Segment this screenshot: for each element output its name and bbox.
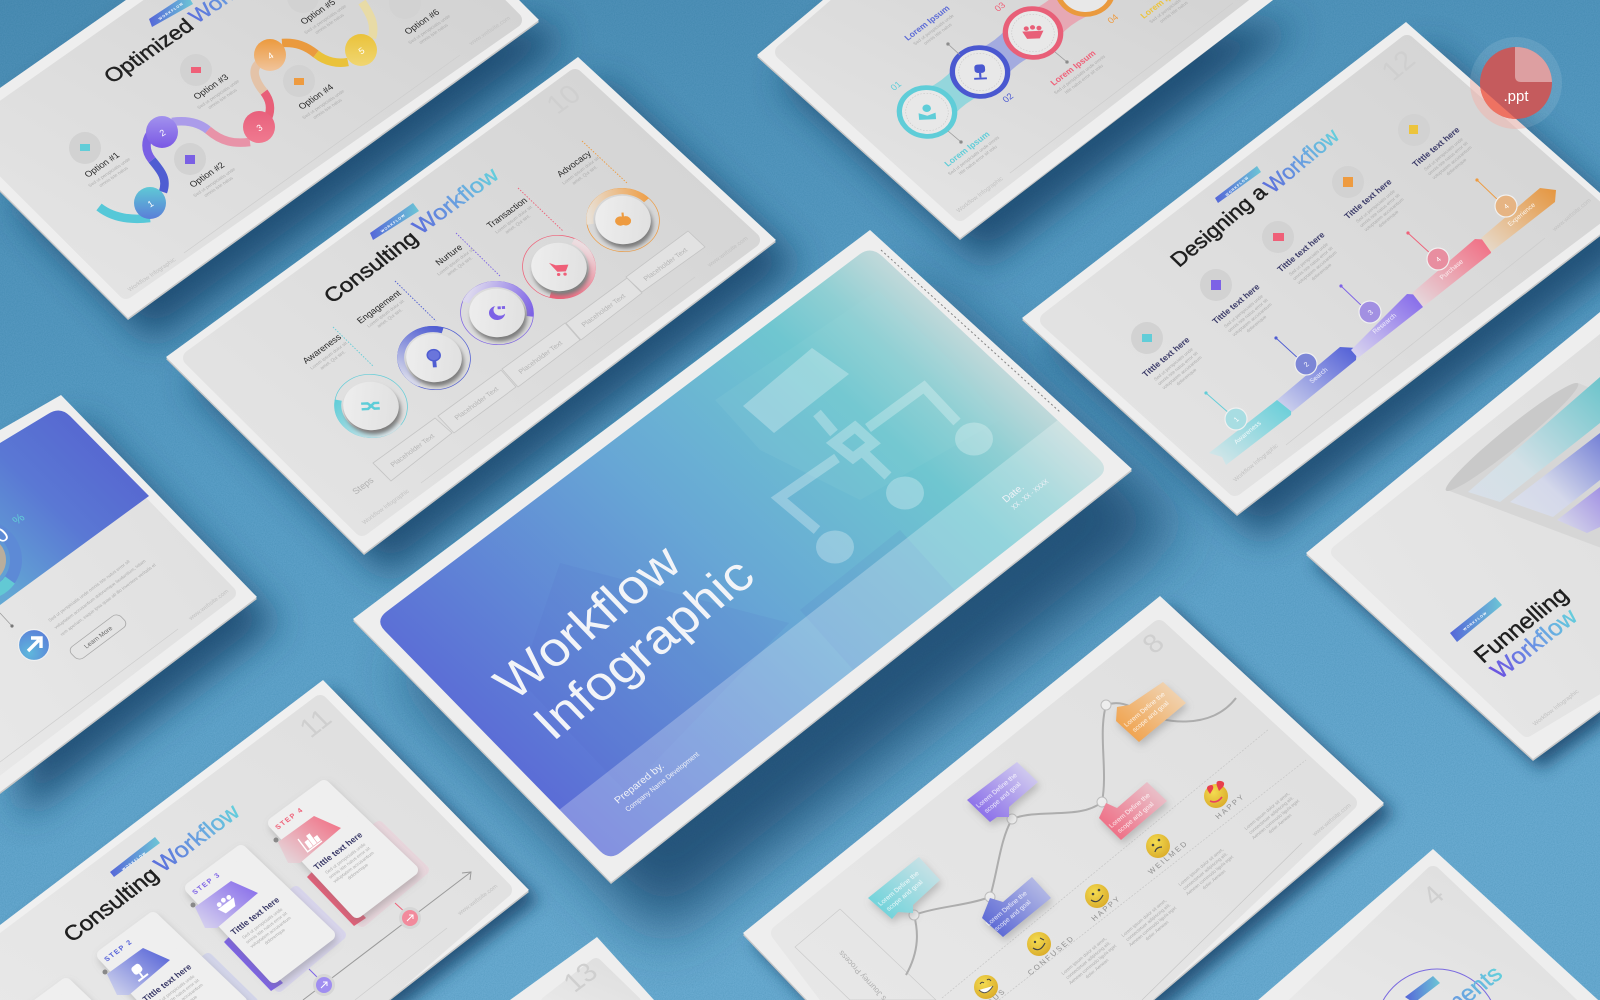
emotion descriptions: Aenean commodo ligula eget <box>1185 854 1235 896</box>
cover gradient with overlays <box>380 250 1104 856</box>
option labels: Sed ut perspiciatis unde <box>192 167 237 198</box>
title and body blocks: Sed ut perspiciatis unde <box>1288 242 1329 277</box>
stage labels: Lorem ipsum dolor sit <box>309 341 349 370</box>
placeholder labels: Placeholder Text <box>518 340 564 376</box>
title and body blocks: Sed ut perspiciatis unde <box>1355 189 1396 224</box>
numbered nodes: 2 <box>1303 361 1311 369</box>
title and body blocks: voluptatem accusantium <box>1431 145 1473 180</box>
body text: voluptatem accusantium doloremque laudantium, totam <box>53 558 147 630</box>
heading: consulting workflow: Workflow <box>407 163 504 239</box>
ring numbers: 03 <box>992 0 1007 13</box>
step nodes 1 to 5: 2 <box>158 127 167 138</box>
leaders <box>947 43 1068 143</box>
icon: arrow button <box>18 630 50 660</box>
emotion descriptions: consectetuer adipiscing elit. <box>1248 795 1295 835</box>
chart: funnel <box>1440 376 1600 555</box>
button: learn more: Learn More <box>83 625 115 650</box>
arrow: awareness: Awareness <box>1233 420 1263 446</box>
option labels: omnis iste natus <box>418 22 450 45</box>
image header <box>0 410 149 605</box>
stage labels: Transaction <box>485 196 529 230</box>
step nodes 1 to 5: 3 <box>255 122 264 133</box>
arrow: awareness <box>1209 400 1292 465</box>
arrow: research <box>1351 294 1423 358</box>
labels: omnis iste natus <box>1159 0 1189 24</box>
callout: purple: Lorem Define the <box>975 772 1019 810</box>
badge: workflow: WORKFLOW <box>1225 176 1250 197</box>
labels: Sed ut perspiciatis unde omnis <box>947 135 1001 176</box>
title and body blocks: Sed ut perspiciatis unde <box>1423 137 1464 172</box>
step nodes 1 to 5: 1 <box>146 198 155 209</box>
callout: purple: scope and goal <box>983 781 1023 815</box>
ring numbers <box>888 0 1120 104</box>
ring 04 <box>1046 0 1124 24</box>
option labels: Sed ut perspiciatis unde <box>303 4 348 35</box>
step card 4 <box>274 786 424 926</box>
callout: red <box>1099 782 1167 840</box>
heading: designing a workflow: Designing a <box>1166 181 1272 271</box>
timeline nodes <box>309 903 421 996</box>
heading: designing a workflow <box>1166 124 1344 271</box>
stage labels: Lorem ipsum dolor sit <box>366 299 406 328</box>
labels: Sed ut perspiciatis unde omnis <box>1053 54 1107 95</box>
placeholder step boxes <box>373 231 705 481</box>
emotion descriptions: Aenean commodo ligula eget <box>1128 905 1178 947</box>
steps label: Steps <box>350 475 376 496</box>
arrow: search <box>1277 347 1357 412</box>
title and body blocks: voluptatem accusantium <box>1296 250 1338 285</box>
arrow: experience <box>1481 188 1556 252</box>
journey curve <box>906 698 1236 975</box>
panel: slide 12 designing a workflow <box>1022 22 1600 516</box>
heading: consulting workflow <box>58 799 245 947</box>
dial: nurture <box>433 258 561 368</box>
stage labels: Engagement <box>355 288 403 325</box>
labels: Lorem Ipsum <box>902 3 952 42</box>
callout: red: scope and goal <box>1116 801 1156 835</box>
stage labels <box>300 147 605 375</box>
stage labels: amet. Qui sint. <box>319 349 346 371</box>
panel: slide with linked circles <box>757 0 1273 240</box>
title and body blocks: Tittle text here <box>1210 282 1262 326</box>
body text: Sed ut perspiciatis unde omnis iste natus error sit <box>47 559 131 623</box>
stage labels: Nurture <box>433 242 465 267</box>
callout: orange: Lorem Define the <box>1123 691 1167 729</box>
title and body blocks: Sed ut perspiciatis unde <box>1153 347 1194 382</box>
emotion labels: WEILMED <box>1146 838 1190 876</box>
connectors between rings <box>910 0 1103 129</box>
panel: main cover slide <box>340 220 1140 900</box>
footer text <box>362 236 750 526</box>
option labels: Sed ut perspiciatis unde <box>301 89 346 120</box>
slide number: 8 <box>1136 628 1170 659</box>
panel: slide left learn more <box>0 395 257 794</box>
badge: workflow: WORKFLOW <box>121 851 147 871</box>
step nodes 1 to 5 <box>134 34 377 219</box>
labels: Lorem Ipsum <box>1048 48 1098 87</box>
labels <box>902 0 1197 181</box>
dial: transaction <box>497 213 621 321</box>
heading: funnelling workflow: Workflow <box>1485 603 1584 684</box>
emotion descriptions: Lorem ipsum dolor sit amet, <box>1060 936 1108 976</box>
title and body blocks: voluptatem accusantium <box>1161 355 1203 390</box>
badge: workflow <box>1405 976 1440 1000</box>
option labels <box>78 0 456 202</box>
donut chart fragment: % <box>9 511 28 527</box>
orbit ring <box>1375 969 1499 1000</box>
step card 4: voluptatem accusantium <box>332 850 375 884</box>
option labels: Option #2 <box>187 160 227 189</box>
emotion descriptions: Aenean commodo ligula eget <box>1251 798 1301 840</box>
step card 4: doloremque <box>346 862 370 880</box>
option labels: Option #1 <box>82 150 122 179</box>
arrow: purchase: Purchase <box>1439 258 1465 281</box>
option labels: omnis iste natus <box>312 97 344 120</box>
callout: teal: scope and goal <box>885 879 925 913</box>
panel: slide 10 consulting workflow <box>166 57 776 555</box>
title and body blocks <box>1140 125 1481 397</box>
heading: funnelling workflow: Funnelling <box>1468 582 1573 668</box>
numbered nodes <box>1225 195 1517 430</box>
title and body blocks: omnis iste natus error sit <box>1292 245 1334 281</box>
stage labels: Lorem ipsum dolor sit <box>561 156 601 185</box>
labels: Lorem Ipsum <box>942 129 992 168</box>
leaders with dots <box>1204 178 1500 414</box>
donut chart fragment <box>0 511 28 594</box>
slide number: 13 <box>557 957 604 998</box>
decor: workflow glyph <box>743 348 993 564</box>
footer text: Workflow Infographic <box>127 258 178 293</box>
option labels: omnis iste natus <box>314 12 346 35</box>
option labels: Option #4 <box>296 82 336 111</box>
date: XX - XX - XXXX <box>1009 477 1051 511</box>
emotion descriptions: dolor. Aenean <box>1267 813 1293 834</box>
step nodes 1 to 5: 4 <box>266 50 275 61</box>
emotion labels: HAPPY <box>1089 894 1123 923</box>
placeholder labels: Placeholder Text <box>643 247 689 283</box>
callout: blue: Lorem Define the <box>985 890 1029 928</box>
ring numbers: 01 <box>888 79 903 92</box>
title and body blocks: doloremque <box>1445 157 1468 176</box>
footer text: Workflow Infographic <box>362 489 411 526</box>
emoji faces <box>974 781 1228 999</box>
ring 02 <box>941 38 1019 106</box>
curve nodes <box>909 700 1111 920</box>
ring 03 <box>994 0 1072 67</box>
labels: Sed ut perspiciatis unde <box>912 13 955 46</box>
step card 3 <box>190 851 341 991</box>
title and body blocks: Tittle text here <box>1140 335 1192 379</box>
labels: iste natus error sit volu <box>1064 63 1104 95</box>
arrow: experience: Experience <box>1507 202 1537 228</box>
placeholder labels: Placeholder Text <box>581 293 627 329</box>
step card 3: omnis iste natus error sit <box>245 911 289 945</box>
icon discs <box>1131 114 1430 354</box>
step card 3: Sed ut perspiciatis unde <box>241 907 284 940</box>
callout: purple <box>967 762 1038 822</box>
badge: workflow <box>1450 597 1502 642</box>
badge: workflow: WORKFLOW <box>1462 611 1488 632</box>
callout: orange <box>1116 682 1186 742</box>
title and body blocks: omnis iste natus error sit <box>1157 350 1199 386</box>
emotion descriptions: Lorem ipsum dolor sit amet, <box>1177 847 1225 887</box>
panel: slide 8 customer journey <box>743 596 1384 1000</box>
icon: ppt file badge: .ppt <box>1503 88 1529 105</box>
option labels: omnis iste natus <box>207 87 239 110</box>
footer text: www.website.com <box>1311 803 1353 838</box>
title: workflow infographic: Workflow <box>483 534 692 710</box>
heading: consulting workflow: Workflow <box>148 799 245 877</box>
icon: ppt file badge <box>1470 37 1562 129</box>
stage labels: amet. Qui sint. <box>376 307 403 329</box>
panel: slide funnelling workflow <box>1306 312 1600 761</box>
emotion descriptions: consectetuer adipiscing elit. <box>1125 902 1172 942</box>
option labels: Sed ut perspiciatis unde <box>87 157 132 188</box>
ring numbers: 02 <box>1000 91 1015 104</box>
title: workflow infographic: Infographic <box>522 547 765 750</box>
placeholder labels: Placeholder Text <box>390 433 436 469</box>
option labels: omnis iste natus <box>98 165 130 188</box>
badge: workflow <box>149 0 193 27</box>
callout: teal <box>868 857 940 919</box>
emotion descriptions: Lorem ipsum dolor sit amet, <box>1243 791 1291 831</box>
option icons <box>69 0 421 175</box>
numbered nodes: 1 <box>1233 416 1241 424</box>
labels: iste natus error sit volu <box>958 144 998 176</box>
title and body blocks: Tittle text here <box>1410 125 1462 169</box>
step card 1 <box>16 984 154 1000</box>
stage labels: Lorem ipsum dolor sit <box>494 205 534 234</box>
title and body blocks: omnis iste natus error sit <box>1427 140 1469 176</box>
title and body blocks: doloremque <box>1175 367 1198 386</box>
title and body blocks: omnis iste natus error sit <box>1227 297 1269 333</box>
stage labels: amet. Qui sint. <box>446 255 473 277</box>
placeholder labels: Placeholder Text <box>454 386 500 422</box>
heading: optimized workflow <box>99 0 278 88</box>
footer text <box>1233 198 1593 483</box>
emotion descriptions <box>1059 790 1305 989</box>
option labels: Option #6 <box>402 7 442 36</box>
title and body blocks: voluptatem accusantium <box>1363 197 1405 232</box>
title and body blocks: doloremque <box>1310 262 1333 281</box>
step card 3: Tittle text here <box>228 895 282 937</box>
badge: workflow <box>110 837 160 877</box>
numbered nodes: 4 <box>1435 256 1443 264</box>
emotion labels <box>964 792 1247 1000</box>
arrow: purchase <box>1412 239 1492 307</box>
stage labels: Awareness <box>300 332 344 366</box>
title and body blocks: Tittle text here <box>1275 230 1327 274</box>
callout: blue <box>982 877 1051 937</box>
heading: consulting workflow <box>319 163 504 308</box>
emotion descriptions: Aenean commodo ligula eget <box>1068 943 1118 985</box>
emotion labels: HAPPY <box>1213 792 1247 821</box>
step card 3: doloremque <box>263 927 287 945</box>
option labels: Sed ut perspiciatis unde <box>407 14 452 45</box>
option labels: Option #3 <box>191 72 231 101</box>
footer text: www.website.com <box>456 884 499 917</box>
prepared by: Prepared by. <box>612 761 667 806</box>
button: learn more <box>68 613 128 661</box>
badge: workflow <box>370 203 419 240</box>
dividers <box>942 729 1306 1000</box>
title and body blocks: doloremque <box>1245 314 1268 333</box>
labels: omnis iste natus <box>923 22 953 46</box>
callout: blue: scope and goal <box>993 899 1033 933</box>
title and body blocks: omnis iste natus error sit <box>1359 192 1401 228</box>
title and body blocks: Tittle text here <box>1342 177 1394 221</box>
dial: engagement <box>372 304 496 412</box>
body text: rem aperiam, eaque ipsa quae ab illo inventore veritatis et <box>59 562 157 637</box>
stage labels: Advocacy <box>555 148 594 179</box>
heading: optimized workflow: Optimized <box>99 15 198 88</box>
stage labels: Lorem ipsum dolor sit <box>436 247 476 276</box>
dial: awareness <box>314 357 428 455</box>
step card 4: STEP 4 <box>274 807 306 831</box>
footer text: www.website.com <box>187 589 230 622</box>
title and body blocks: doloremque <box>1377 209 1400 228</box>
footer text: www.website.com <box>1551 198 1593 233</box>
axis arrow <box>303 872 471 1000</box>
arrow: search: Search <box>1308 367 1330 385</box>
panel: slide 11 consulting steps <box>0 680 529 1000</box>
footer text: www.website.com <box>468 16 512 47</box>
leader <box>0 613 14 628</box>
badge: workflow: WORKFLOW <box>380 213 407 233</box>
step card 2 <box>102 918 253 1000</box>
prepared by: Company Name Development <box>623 750 701 813</box>
emotion labels: CONFUSED <box>1026 934 1077 977</box>
date <box>1000 477 1051 511</box>
option labels: omnis iste natus <box>203 175 235 198</box>
step card 4: Tittle text here <box>311 830 365 872</box>
placeholder labels <box>390 247 689 469</box>
callout: teal: Lorem Define the <box>877 870 921 908</box>
arrow: research: Research <box>1372 312 1399 335</box>
badge: workflow <box>1215 166 1261 203</box>
emotion descriptions: dolor. Aenean <box>1084 958 1110 979</box>
ring numbers: 04 <box>1105 12 1120 25</box>
chart: winding option path <box>99 2 373 219</box>
step card 2: STEP 2 <box>103 939 135 963</box>
ring 01 <box>888 78 966 146</box>
step card 3: voluptatem accusantium <box>249 915 292 949</box>
panel: slide elements <box>1235 849 1600 1000</box>
emotion descriptions: Lorem ipsum dolor sit amet, <box>1120 898 1168 938</box>
slide number: 11 <box>293 703 338 743</box>
step card 4: omnis iste natus error sit <box>328 846 372 880</box>
slide number: 12 <box>1375 45 1421 86</box>
dotted leaders <box>333 141 627 366</box>
journey process box <box>795 909 936 1000</box>
emotion descriptions: dolor. Aenean <box>1144 920 1170 941</box>
title and body blocks: Sed ut perspiciatis unde <box>1223 294 1264 329</box>
slide number: 4 <box>1416 880 1450 911</box>
emotion descriptions: dolor. Aenean <box>1201 869 1227 890</box>
footer text: Workflow Infographic <box>1532 689 1580 727</box>
step nodes 1 to 5: 5 <box>357 45 366 56</box>
stage labels: amet. Qui sint. <box>504 213 531 235</box>
footer text: Workflow Infographic <box>956 176 1005 214</box>
emotion descriptions: consectetuer adipiscing elit. <box>1065 940 1112 980</box>
step card 4: Sed ut perspiciatis unde <box>324 842 367 875</box>
numbered nodes: 4 <box>1503 203 1511 211</box>
slide number: 10 <box>540 79 587 119</box>
heading: designing a workflow: Workflow <box>1259 124 1344 197</box>
emotion descriptions: consectetuer adipiscing elit. <box>1182 851 1229 891</box>
badge: workflow: WORKFLOW <box>158 2 185 21</box>
numbered nodes: 3 <box>1367 309 1375 317</box>
dial: advocacy <box>559 164 687 276</box>
step card 3: STEP 3 <box>191 872 223 896</box>
footer text <box>127 16 512 293</box>
panel: slide 9 optimized workflow <box>0 0 539 320</box>
footer text: www.website.com <box>706 236 750 269</box>
date: Date. <box>1000 482 1027 505</box>
callout: red: Lorem Define the <box>1108 792 1152 830</box>
heading: consulting workflow: Consulting <box>58 863 163 947</box>
panel: slide 13 corner <box>510 937 654 1000</box>
footer text: Workflow Infographic <box>1233 443 1280 483</box>
heading: consulting workflow: Consulting <box>319 227 423 308</box>
title and body blocks: voluptatem accusantium <box>1231 302 1273 337</box>
option labels: Sed ut perspiciatis unde <box>196 79 241 110</box>
callout: orange: scope and goal <box>1131 700 1171 734</box>
stage labels: amet. Qui sint. <box>571 164 598 186</box>
